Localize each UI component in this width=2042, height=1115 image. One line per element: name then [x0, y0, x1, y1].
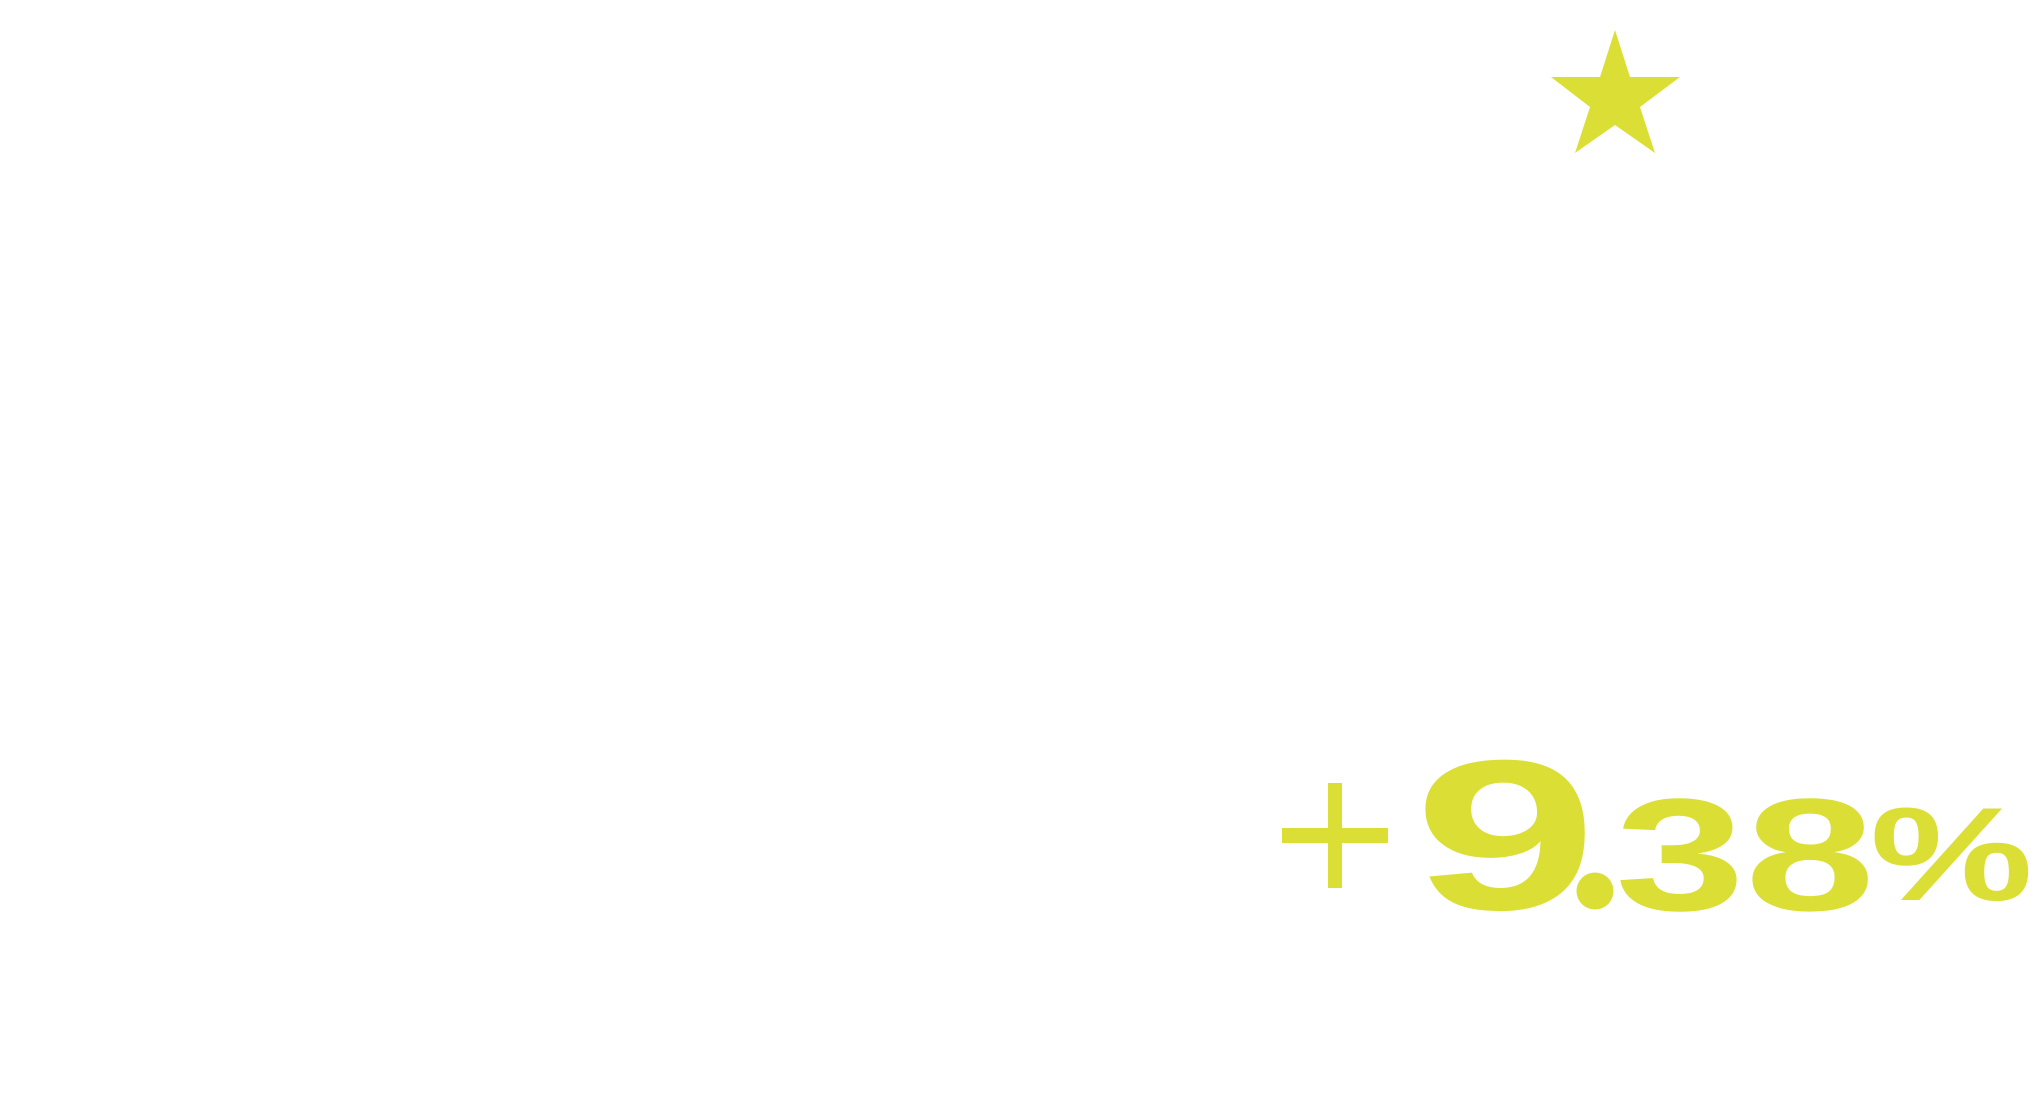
icon: star	[1551, 30, 1680, 153]
digits 38: 38	[1615, 765, 1875, 944]
plus sign	[1282, 783, 1388, 888]
digit 9: 9	[1414, 716, 1597, 955]
decimal point	[1576, 872, 1614, 910]
percent sign: %	[1870, 781, 2033, 929]
statistic: +9.38%	[1282, 716, 2033, 955]
